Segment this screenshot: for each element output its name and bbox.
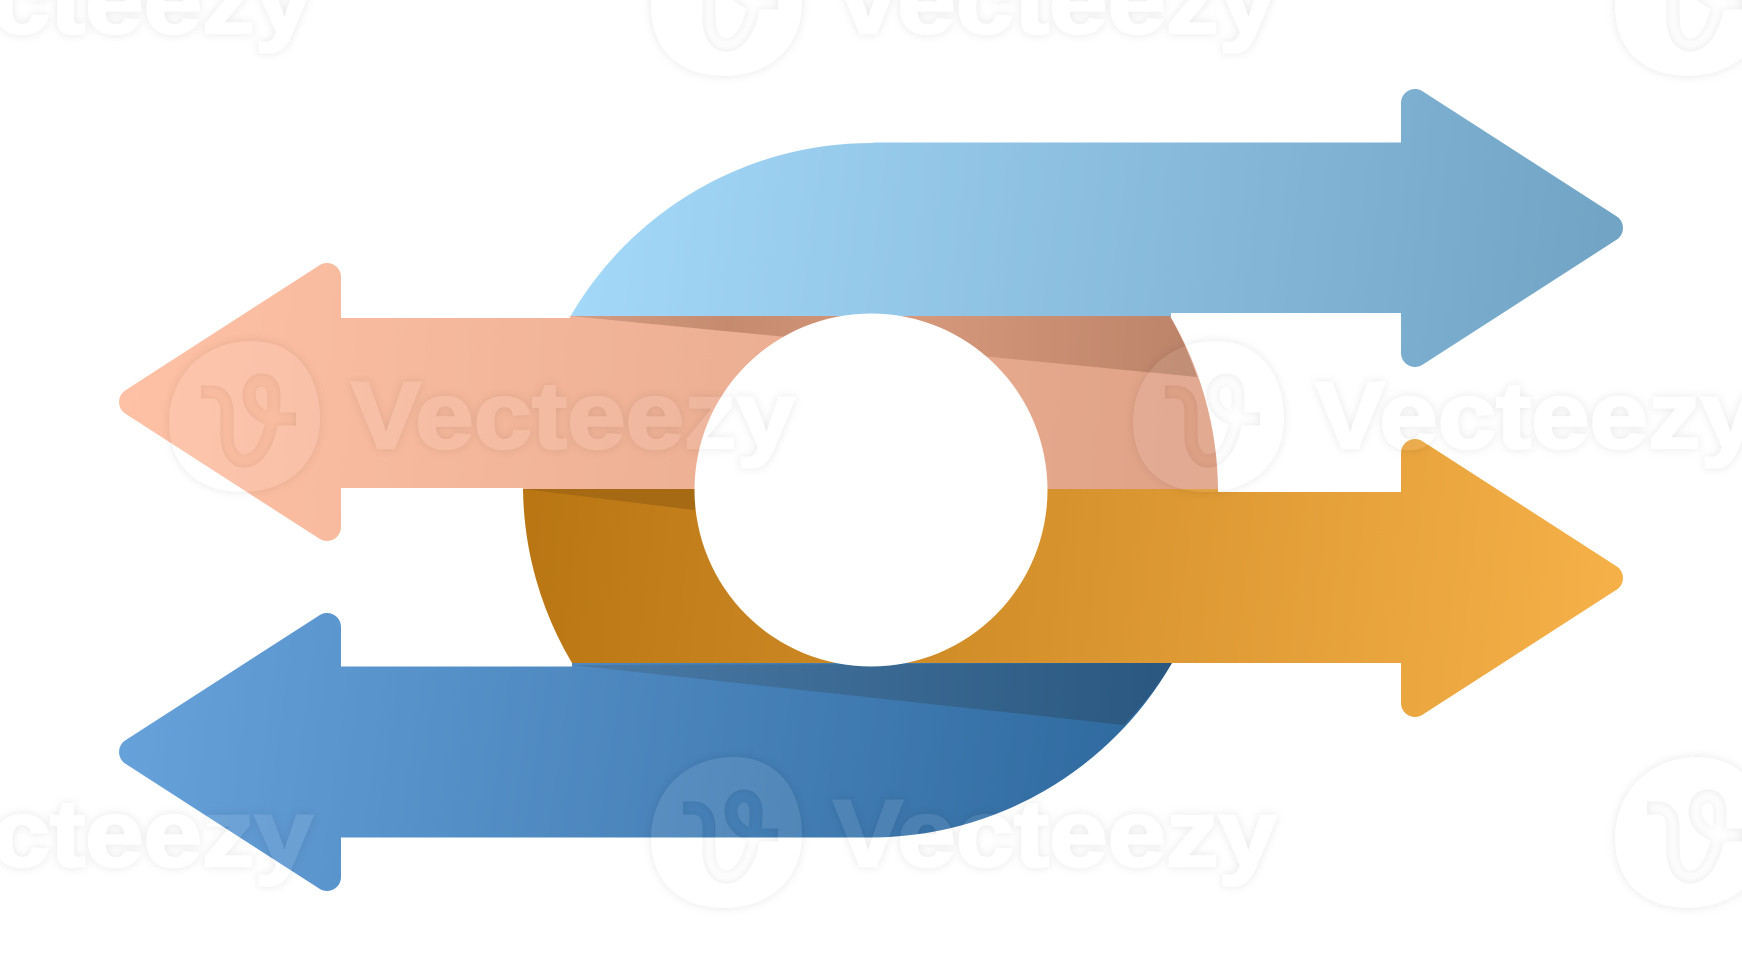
shadow on peach arrow [570,316,1197,377]
watermark: bottom row right [1615,757,1742,908]
arrow: orange pointing right [523,439,1623,717]
shadow on orange arrow [523,489,720,510]
watermark: top row right [1615,0,1742,76]
watermark: bottom row centre: Vecteezy [833,781,1277,887]
watermark: left middle [169,341,795,492]
arrow: top light blue pointing right [570,89,1623,367]
watermark: top row centre [651,0,1277,76]
arrow: peach pointing left [119,263,1218,541]
arrow: bottom blue pointing left [119,613,1172,891]
watermark: bottom row centre [651,757,1277,908]
shadow on blue arrow [572,663,1172,725]
central white circle [694,314,1048,666]
watermark: left middle: Vecteezy [351,363,795,469]
watermark: right middle: Vecteezy [1315,363,1742,469]
watermark: right middle [1133,341,1742,492]
